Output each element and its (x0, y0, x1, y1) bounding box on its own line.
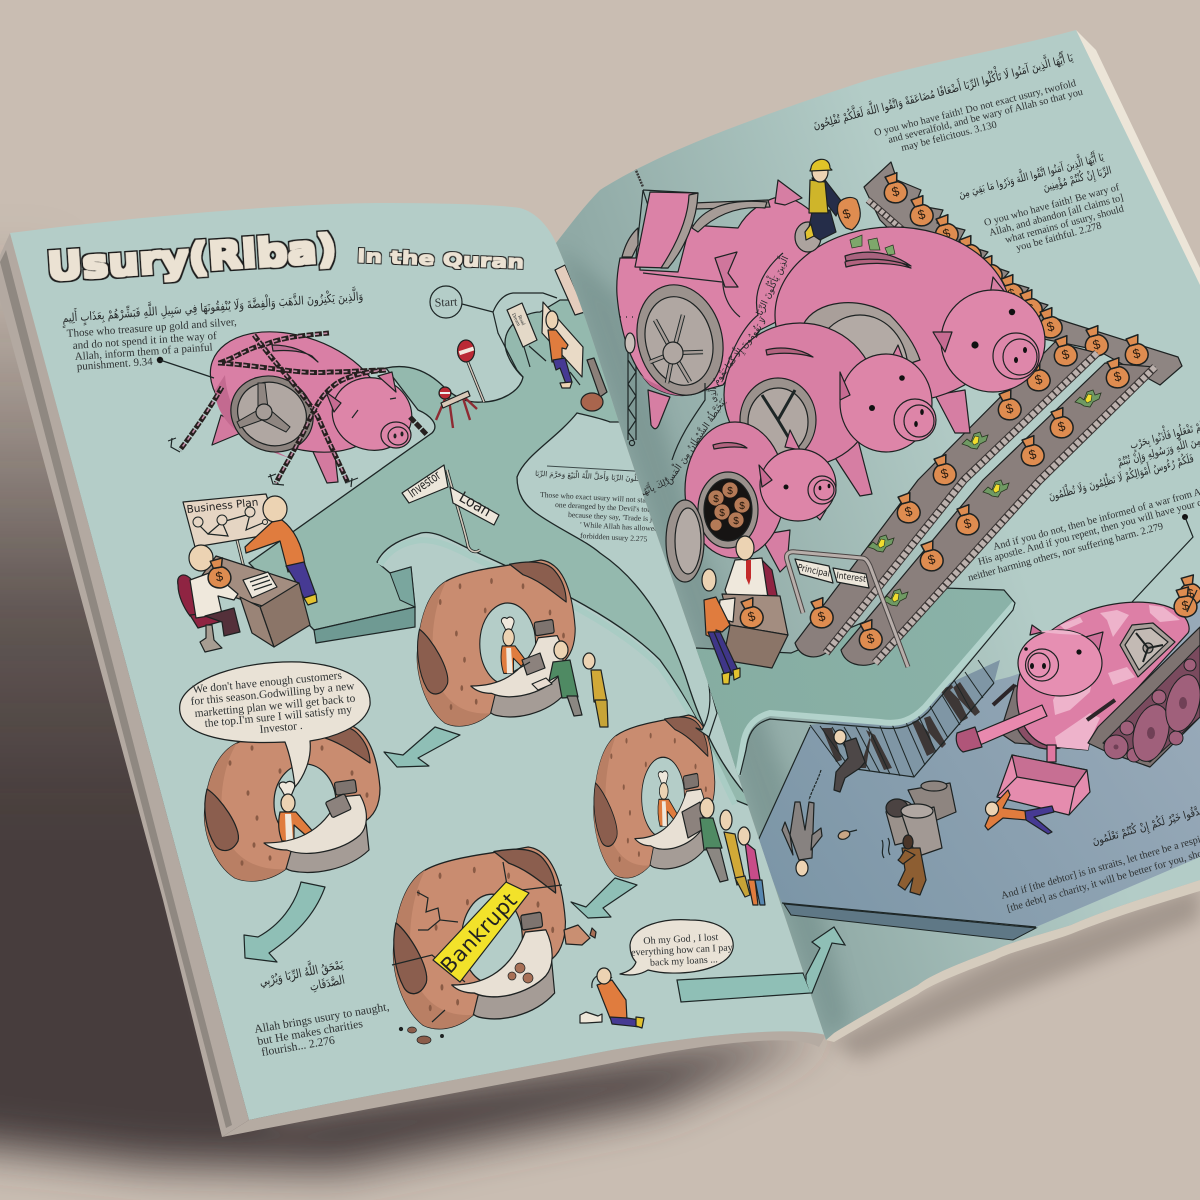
upper stepped conveyor: $ (1131, 345, 1143, 362)
upper stepped conveyor (864, 162, 1182, 385)
start circle and dream road: Dream (510, 313, 521, 327)
lower twin conveyors: $ (1056, 418, 1068, 435)
text: verse 2.278: what remains of usury, should (1004, 204, 1125, 246)
principal and interest gate: Principal (796, 563, 831, 580)
arabic text along pigs: يَتَخَبَّطُهُ الشَّيْطَانُ مِنَ الْمَسِّ (662, 395, 729, 486)
start circle and dream road (430, 265, 607, 411)
small piggy bank with coins: $ (727, 486, 733, 497)
text: verse 2.279: فَلَكُمْ رُءُوسُ أَمْوَالِكُمْ لَا تَظْلِمُونَ وَلَا تُظْلَمُونَ (1046, 450, 1195, 504)
speech bubble: lost everything: everything how can I pay (631, 942, 733, 959)
small piggy bank with coins: $ (733, 516, 739, 527)
man carrying trash bins (882, 781, 956, 895)
lower floor (757, 600, 1200, 940)
speech bubble: owner: We don't have enough customers (192, 670, 343, 696)
text: verse 2.275: الَّذِينَ يَأْكُلُونَ الرِّبَا وَأَحَلَّ اللَّهُ الْبَيْعَ وَحَرَّمَ الرِّبَا (535, 466, 662, 484)
lower twin conveyors: $ (865, 630, 877, 647)
upper stepped conveyor: $ (1045, 318, 1057, 335)
upper stepped conveyor: $ (1006, 285, 1018, 302)
text: verse 2.275 (536, 466, 656, 542)
lower twin conveyors: $ (1112, 368, 1124, 385)
left page (0, 200, 840, 1140)
lower twin conveyors: $ (1033, 371, 1045, 388)
signpost: investor and loan (402, 465, 499, 552)
text: verse 2.276 (255, 960, 389, 1056)
arabic text along pigs: لَا يَقُومُونَ إِلَّا كَمَا يَقُومُ (708, 314, 771, 388)
medium piggy bank (724, 323, 936, 496)
text: verse 2.275: one deranged by the Devil's touch. That (555, 500, 677, 515)
text: verse 3.130: O you who have faith! Do not exact usury, twofold (873, 78, 1077, 139)
text: verse 2.279: مِنَ اللَّهِ وَرَسُولِهِ وَإِنْ تُبْتُمْ (1115, 431, 1200, 471)
donut shop: bankrupt: Bankrupt (436, 888, 522, 978)
small piggy bank with coins (666, 422, 836, 582)
speech bubble: lost everything: back my loans ... (650, 954, 718, 969)
business plan scene (178, 494, 317, 652)
worker pouring money (795, 159, 911, 266)
text: verse 2.276: يَمْحَقُ اللَّهُ الرِّبَا وَيُرْبِي (257, 952, 345, 990)
right page (530, 0, 1200, 1060)
lower twin conveyors: $ (926, 551, 938, 568)
text: verse 9.34 (61, 286, 364, 378)
speech bubble: owner (180, 662, 370, 787)
text: verse 2.276: flourish... 2.276 (260, 1034, 336, 1059)
bottom arrow head (806, 927, 845, 993)
text: verse 2.278 (956, 147, 1125, 254)
principal and interest gate (787, 552, 908, 667)
speech bubble: owner: marketting plan we will get back to (194, 693, 356, 720)
text: verse 9.34: وَالَّذِينَ يَكْنِزُونَ الذَّهَبَ وَالْفِضَّةَ وَلَا يُنْفِقُونَهَا فِي سَبِيلِ اللَّهِ فَبَشِّرْهُمْ بِعَذَابٍ أَلِيمٍ (61, 286, 364, 329)
text: verse 2.275: because they say, 'Trade is just like usury. (568, 510, 695, 526)
flattened orange man (985, 790, 1054, 834)
upper stepped conveyor: $ (985, 266, 997, 283)
lower twin conveyors: $ (1060, 346, 1072, 363)
small piggy bank with coins: $ (719, 508, 725, 519)
text: verse 3.130: يَا أَيُّهَا الَّذِينَ آمَنُوا لَا تَأْكُلُوا الرِّبَا أَضْعَافًا مُضَاعَفَةً وَاتَّقُوا اللَّهَ لَعَلَّكُمْ تُفْلِحُونَ (810, 46, 1075, 132)
text: verse 3.130: and severalfold, and be wary of Allah so that you (887, 87, 1084, 146)
arabic text along pigs: الَّذِينَ يَأْكُلُونَ الرِّبَا (750, 253, 791, 317)
text: verse 2.278: يَا أَيُّهَا الَّذِينَ آمَنُوا اتَّقُوا اللَّهَ وَذَرُوا مَا بَقِيَ مِنَ (956, 147, 1106, 201)
open piggy bank: machine body (617, 180, 815, 429)
text: verse 2.276: الصَّدَقَاتِ (308, 973, 346, 994)
donut shop: bankrupt (392, 847, 596, 1044)
tank pig: $ (1180, 597, 1191, 613)
tank pig (956, 574, 1200, 815)
lower twin conveyors: $ (1004, 400, 1016, 417)
speech bubble: lost everything: Oh my God , I lost (643, 932, 719, 947)
arrows: left page (244, 680, 717, 962)
text: verse 2.276: but He makes charities (256, 1017, 364, 1048)
arabic text along pigs (635, 253, 791, 500)
lower twin conveyors: $ (816, 608, 828, 625)
donut shop 3 (594, 715, 765, 905)
text: verse 2.278: O you who have faith! Be wary of (983, 182, 1121, 229)
business plan scene: $ (214, 568, 225, 584)
text: verse 2.278: you be faithful. 2.278 (1015, 220, 1103, 254)
chained piggy bank (168, 330, 428, 488)
rat (837, 829, 857, 841)
text: verse 2.275: forbidden usury 2.275 (580, 531, 648, 544)
start circle and dream road: Start (434, 294, 458, 310)
title: in the Quran (357, 246, 524, 273)
donut shop 2 (204, 723, 380, 881)
text: verse 2.279 (967, 411, 1200, 602)
speech bubble: owner: Investor . (259, 720, 303, 736)
text: verse 9.34: Those who treasure up gold and silver, (66, 316, 237, 340)
text: verse 9.34: and do not spend it in the way of (72, 330, 217, 352)
signpost: investor and loan: Loan (456, 488, 494, 520)
business plan scene: Business Plan (186, 497, 259, 516)
road barrier (436, 387, 477, 428)
cage and prisoners (810, 660, 1000, 792)
crane chain (628, 168, 698, 446)
arrow: bottom to right page (677, 973, 811, 1002)
donut shop 1 (417, 560, 608, 727)
text: verse 2.278: Allah, and abandon [all claims to] (988, 192, 1125, 239)
lower twin conveyors: $ (939, 465, 951, 482)
lower twin conveyors: $ (1027, 446, 1039, 463)
title (47, 230, 524, 284)
fallen chained man (782, 770, 822, 876)
text: verse 2.275: ' While Allah has allowed trade and (580, 520, 688, 535)
upper stepped conveyor: $ (964, 246, 976, 263)
man in despair (580, 968, 644, 1028)
upper stepped conveyor: $ (890, 183, 902, 200)
tank pig: $ (1185, 585, 1196, 601)
speech bubble: lost everything (620, 920, 733, 975)
road: left page (249, 300, 760, 810)
upper stepped conveyor: $ (1025, 300, 1037, 317)
text: verse 2.275: Those who exact usury will not stand but like (540, 490, 679, 506)
start circle and dream road: Road (516, 315, 525, 327)
upper stepped conveyor: $ (916, 206, 928, 223)
small piggy bank with coins: $ (739, 501, 745, 512)
worker pouring money: $ (840, 205, 853, 222)
arabic text along pigs: ذَٰلِكَ بِأَنَّهُمْ (635, 473, 672, 500)
upper stepped conveyor: $ (941, 225, 953, 242)
arabic text along pigs: الَّذِي (705, 387, 719, 403)
text: verse 2.276: Allah brings usury to naught, (253, 1000, 390, 1036)
lower twin conveyors: $ (962, 515, 974, 532)
speech bubble: owner: for this season.Godwilling by a new (190, 680, 356, 708)
banker and client at desk (702, 536, 788, 684)
principal and interest gate: Interest (836, 571, 867, 585)
upper stepped conveyor: $ (1091, 336, 1103, 353)
title: Usury(Riba) (46, 226, 338, 289)
lower twin conveyors (795, 334, 1155, 665)
speech bubble: owner: the top.I'm sure I will satisfy my (204, 704, 353, 730)
text: verse 9.34: Allah, inform them of a painful (74, 341, 213, 363)
text: verse 3.130: may be felicitous. 3.130 (900, 119, 998, 154)
lower twin conveyors: $ (903, 503, 915, 520)
text: verse 2.278: الرِّبَا إِنْ كُنْتُمْ مُؤْمِنِينَ (1041, 163, 1113, 196)
text: verse 9.34: punishment. 9.34 (76, 356, 154, 373)
no entry sign (458, 340, 484, 402)
big piggy bank (775, 227, 1045, 433)
text: verse 2.279: neither harming others, nor suffering harm. 2.279 (967, 521, 1164, 584)
road: platform (696, 588, 1016, 776)
small piggy bank with coins: $ (713, 494, 719, 505)
banker and client at desk: $ (746, 608, 758, 625)
signpost: investor and loan: Investor (406, 468, 444, 501)
